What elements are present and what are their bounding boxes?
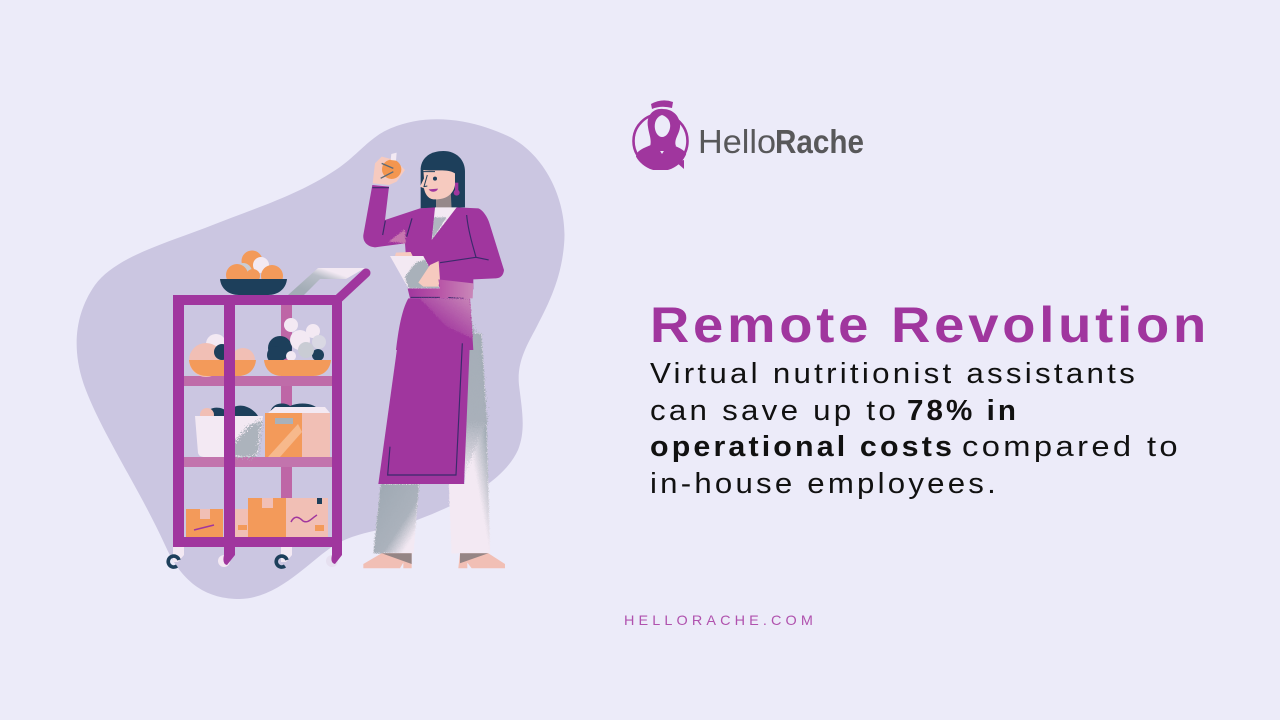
body text: operational costs [650, 431, 955, 463]
holding hands [395, 252, 413, 256]
upper skirt [396, 298, 473, 350]
illustration: food cart [168, 250, 366, 567]
title: Remote Revolution [650, 297, 1210, 353]
body text: in-house employees. [650, 468, 999, 500]
body text: compared to [962, 431, 1181, 463]
face [420, 170, 455, 199]
shelf 3 boxes [186, 498, 328, 537]
neck [436, 190, 452, 210]
shelves [184, 376, 332, 386]
website url: HELLORACHE.COM [624, 612, 817, 628]
clipboard [390, 256, 440, 288]
logo wordmark: Hello [698, 123, 776, 160]
body text: 78% in [907, 395, 1019, 427]
body text: Virtual nutritionist assistants [650, 358, 1138, 390]
illustration: nutritionist woman [363, 151, 505, 568]
body text: can save up to [650, 395, 899, 427]
hair [421, 151, 465, 208]
wheels [168, 556, 179, 567]
logo [632, 100, 864, 170]
jacket lines [372, 188, 489, 263]
rear wheel stems [173, 547, 292, 562]
shelf 1 produce [189, 318, 331, 377]
background blob [77, 119, 565, 599]
jacket [363, 185, 504, 289]
hair, face and upper body [363, 151, 504, 350]
back trouser and legs [363, 333, 505, 568]
cart frame [173, 273, 366, 565]
top bowl with oranges [220, 250, 287, 295]
waist [408, 279, 473, 298]
grey skirt side [450, 312, 487, 480]
blouse [432, 207, 457, 241]
logo icon [632, 100, 690, 170]
handle paper [288, 268, 365, 295]
hand with orange [373, 157, 405, 185]
dress [378, 339, 470, 484]
logo: Rache [775, 123, 864, 160]
body text [650, 358, 1181, 500]
rear post [281, 305, 292, 537]
shelf 2 produce [195, 404, 330, 457]
